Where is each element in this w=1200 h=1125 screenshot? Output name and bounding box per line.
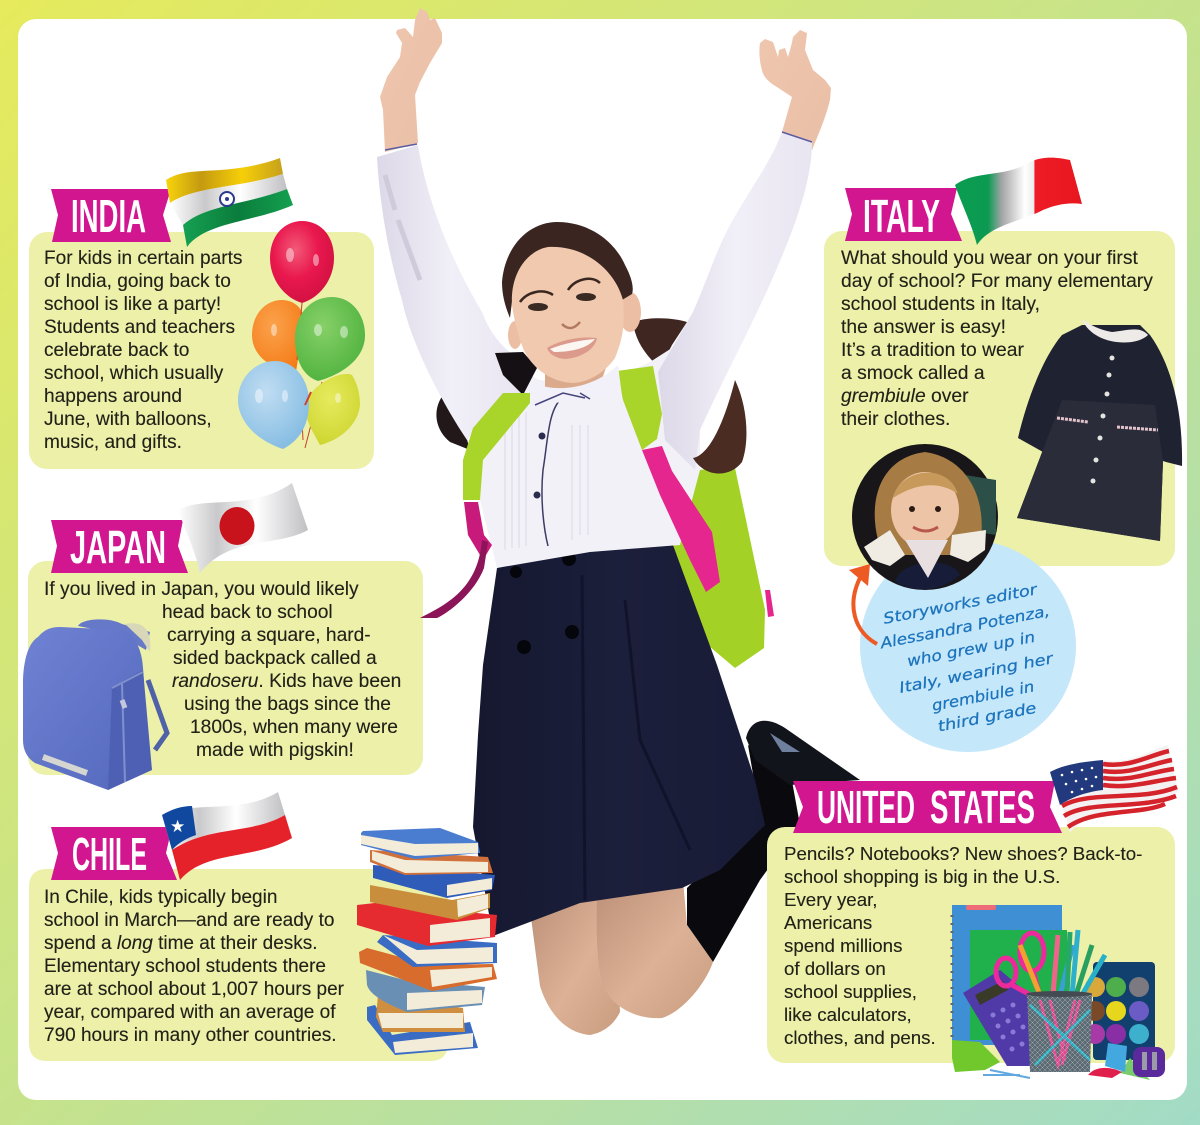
panel: Japan [23,483,423,790]
icon: Chile flag [162,792,292,880]
Chile banner: CHILE [72,828,147,880]
icon: school supplies [952,905,1165,1080]
Japan banner: JAPAN [70,521,166,573]
left sleeve [377,145,525,440]
collar [530,365,622,405]
Chile text: In Chile, kids typically begin [44,887,277,908]
caption text: Italy, wearing her [898,649,1055,697]
sleeve folds [385,175,420,280]
US banner: UNITED [817,781,915,833]
hair [502,222,633,318]
book 2 [370,850,493,875]
right sleeve [658,132,812,470]
under skirt and shoe [687,721,860,962]
skirt [473,544,765,936]
Italy banner [845,188,962,242]
Italy banner: ITALY [863,190,940,242]
panel: United States [767,745,1178,1080]
India text: school is like a party! [44,294,221,315]
paint palette [1093,962,1155,1060]
pencils [1020,930,1105,995]
icon: India flag [166,158,293,247]
Chile text: 790 hours in many other countries. [44,1025,337,1046]
Chile text: spend a long time at their desks. [44,933,318,954]
caption text: who grew up in [906,628,1037,670]
book 1 [361,828,480,859]
caption text [878,580,1055,735]
blue notebook [952,905,1062,1045]
icon: balloons [238,221,365,449]
US banner: STATES [930,781,1035,833]
panel: India [29,158,374,469]
US text [784,843,1142,1048]
Japan text: If you lived in Japan, you would likely [44,579,359,600]
backpack tab [765,590,774,617]
icon: grembiule smock [1017,319,1182,541]
legs [530,880,713,1035]
ears [619,292,641,332]
placket [542,398,562,546]
callout: blue caption circle [860,540,1076,752]
India text: celebrate back to [44,340,189,361]
calculator [963,970,1032,1066]
Japan text: using the bags since the [184,694,391,715]
photo: editor as a child [852,444,998,590]
hair behind left shoulder [495,352,537,395]
Japan text: carrying a square, hard- [167,625,371,646]
backpack straps [420,366,720,618]
US text: school shopping is big in the U.S. [784,866,1060,887]
nose [562,322,580,328]
Italy text: a smock called a [841,363,985,384]
stapler [952,1040,1000,1072]
collar piping [535,393,590,405]
arrow to photo [849,564,877,644]
Italy text: their clothes. [841,409,950,430]
book 4 [370,885,490,920]
Italy text: day of school? For many elementary [841,271,1153,292]
US text: school supplies, [784,981,917,1002]
Japan text: made with pigskin! [196,740,354,761]
US text box [767,827,1175,1063]
Japan text: randoseru. Kids have been [172,671,401,692]
Italy text: grembiule over [841,386,969,407]
Chile text box [29,869,448,1061]
Chile text: are at school about 1,007 hours per [44,979,345,1000]
Japan text: 1800s, when many were [190,717,398,738]
book 3 [373,865,495,898]
caption text: Alessandra Potenza, [878,602,1051,653]
caption text: third grade [936,699,1038,735]
US text: Pencils? Notebooks? New shoes? Back-to- [784,843,1142,864]
green notebook [970,930,1067,1040]
erasers and sharpener [1088,1043,1165,1080]
scissors [996,933,1044,1000]
book 9 [376,995,465,1032]
US text: Every year, [784,889,877,910]
icon: Japan flag [178,483,308,573]
US text: Americans [784,912,872,933]
Chile banner [51,827,177,880]
Japan text [44,579,401,761]
US text: clothes, and pens. [784,1027,936,1048]
India text: of India, going back to [44,271,231,292]
neck [545,350,612,392]
Italy text: the answer is easy! [841,317,1006,338]
book 6 [377,935,497,967]
book 5 [357,903,497,946]
icon: Italy flag [955,158,1082,245]
panel: Italy [824,158,1182,752]
Italy text box [824,231,1175,566]
India banner [51,189,171,242]
panel: Chile [29,792,448,1061]
Japan text: head back to school [162,602,333,623]
icon: stack of books [357,828,497,1055]
blouse [480,330,700,568]
book 7 [359,948,497,991]
backpack body [668,468,765,668]
US text: spend millions [784,935,902,956]
Italy text: It’s a tradition to wear [841,340,1024,361]
eyebrows [520,279,600,302]
Chile text [44,887,345,1046]
ponytails [436,318,687,450]
US banner [793,781,1062,833]
Chile text: year, compared with an average of [44,1002,336,1023]
right arm and hand [759,30,831,150]
paper clips [983,1070,1030,1078]
India text: Students and teachers [44,317,235,338]
India text [44,248,242,453]
left arm and hand [380,8,442,152]
blouse pleats [505,412,588,550]
India text: happens around [44,386,182,407]
skirt pleats [582,575,690,900]
India text: school, which usually [44,363,224,384]
icon: randoseru backpack [23,619,167,790]
India banner: INDIA [71,190,146,242]
book 8 [366,970,485,1012]
US text: of dollars on [784,958,886,979]
icon: US flag [1050,745,1178,833]
smile [547,337,597,359]
India text box [29,232,374,469]
book 10 [367,1005,478,1055]
India text: music, and gifts. [44,432,182,453]
Chile text: school in March—and are ready to [44,910,334,931]
illustration: jumping girl [377,8,860,1035]
US text: like calculators, [784,1004,912,1025]
eyes [528,293,596,311]
face [512,247,624,383]
skirt buttons [510,552,579,654]
Japan text: sided backpack called a [173,648,377,669]
India text: For kids in certain parts [44,248,242,269]
caption text: grembiule in [930,677,1036,715]
curls over sleeve [693,380,746,474]
Italy text: What should you wear on your first [841,248,1138,269]
Japan text box [28,561,423,775]
icon: Chile flag: ★ [170,817,185,837]
caption text: Storyworks editor [882,580,1039,628]
Italy text [841,248,1153,430]
Italy text: school students in Italy, [841,294,1040,315]
Chile text: Elementary school students there [44,956,326,977]
mesh pencil cup [1026,991,1092,1072]
India text: June, with balloons, [44,409,212,430]
Japan banner [51,520,188,573]
